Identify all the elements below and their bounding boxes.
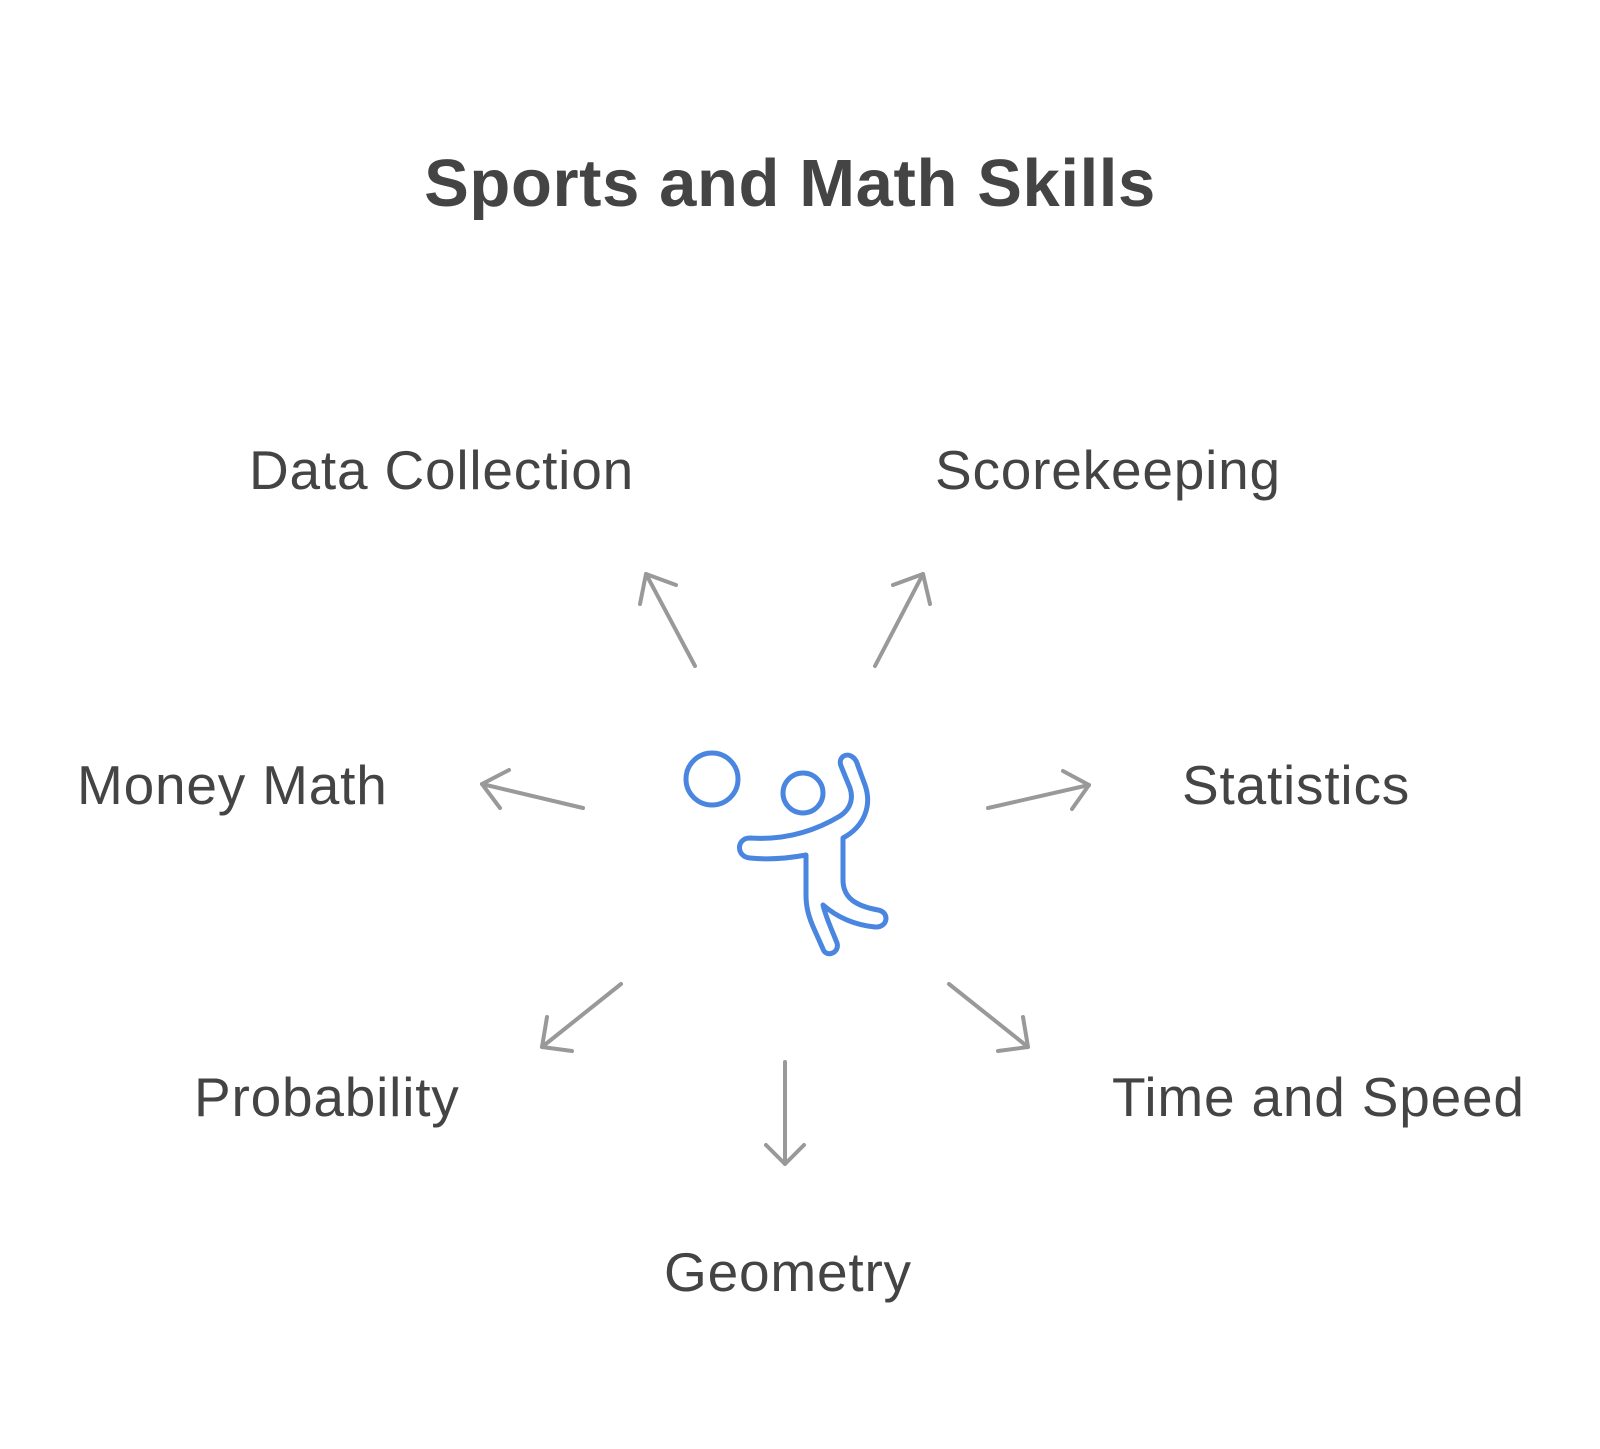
arrows [482, 574, 1089, 1164]
label: Statistics: Statistics [1182, 754, 1410, 816]
arrow: statistics [988, 771, 1089, 809]
arrow: time and speed [949, 984, 1028, 1051]
title: Sports and Math Skills [424, 146, 1156, 221]
arrow: money math [482, 770, 583, 808]
arrow: geometry [766, 1062, 804, 1164]
arrow: scorekeeping [875, 574, 930, 666]
label: Scorekeeping: Scorekeeping [935, 439, 1281, 501]
icon: athlete with ball [686, 753, 886, 954]
label: Data Collection: Data Collection [249, 439, 634, 501]
label: Geometry: Geometry [664, 1241, 912, 1303]
label: Time and Speed: Time and Speed [1112, 1066, 1525, 1128]
arrow: data collection [640, 574, 695, 666]
label: Probability: Probability [194, 1066, 460, 1128]
arrow: probability [542, 984, 621, 1051]
label: Money Math: Money Math [77, 754, 388, 816]
